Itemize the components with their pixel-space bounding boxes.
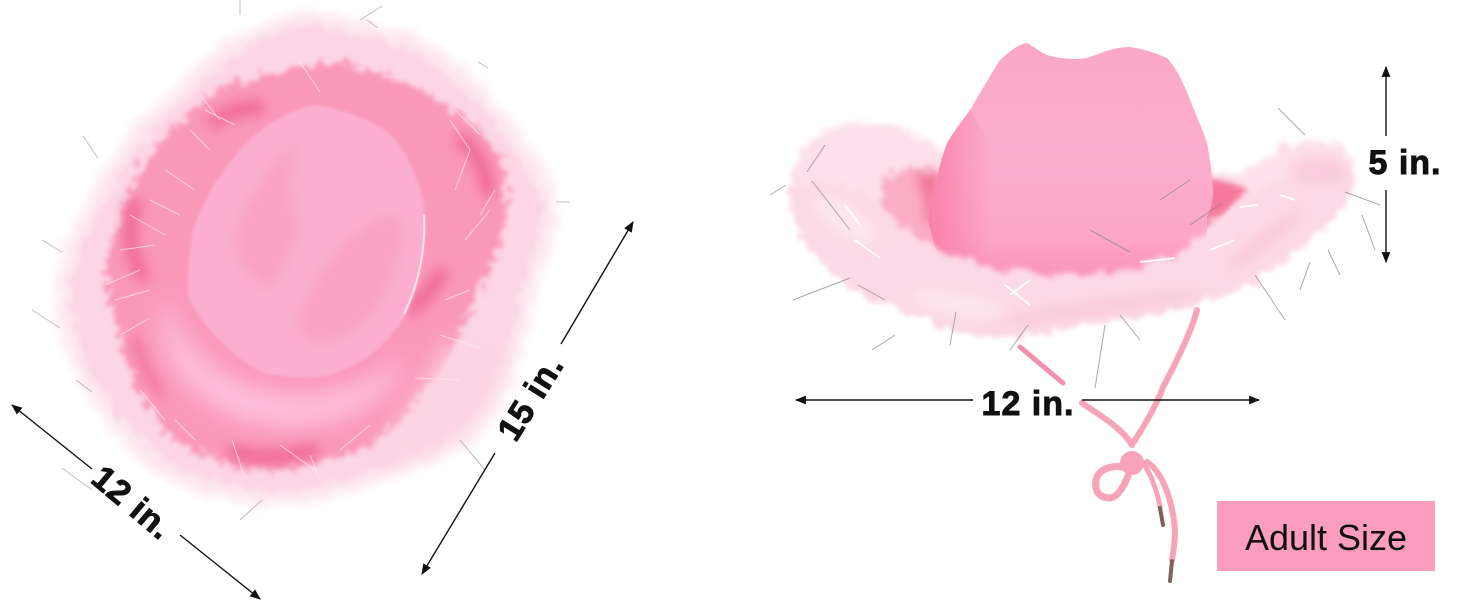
left hat tinsel [32,0,570,520]
right hat back feather trim [789,123,1354,337]
right hat cord right strand [1133,310,1197,443]
arrow: left hat 12 in. (lower segment) [180,535,260,599]
badge: adult size [1217,501,1435,571]
label: left hat length: 15 in. [490,349,572,447]
arrow: right hat height (lower) [1385,190,1387,262]
right hat cord short end [1143,463,1160,507]
left hat: top view [32,0,570,520]
left hat dark brim edge patches [130,108,488,457]
right hat white hairs [845,195,1295,305]
right hat tinsel [770,108,1380,388]
right hat feather shading [807,156,1350,330]
left hat feather trim [71,26,544,492]
right hat left inner pink [881,170,945,255]
arrow: right hat width (left) [796,399,973,401]
left hat lower right pale fur overlap [365,345,510,464]
left hat crown creases [236,145,400,342]
right hat cord loop [1096,467,1128,498]
right hat cord lower strand [1082,403,1132,445]
right hat front feather trim [789,167,1350,337]
badge: adult size: Adult Size [1245,517,1407,558]
right hat crown [928,43,1213,285]
right hat crown left shading [928,110,992,285]
right hat cord knot [1120,451,1144,475]
arrow: right hat height (upper) [1385,67,1387,136]
label: left hat width: 12 in. [84,459,180,547]
label: right hat height: 5 in. [1368,144,1442,182]
left hat outer feather halo [57,12,558,506]
right hat: side view [770,43,1380,581]
left hat light band below crown [163,295,405,426]
left hat white feather hairs [105,62,495,480]
right hat cord left strand [1020,347,1063,383]
right hat cord long end [1147,462,1175,560]
arrow: left hat 12 in. (upper segment) [12,405,92,469]
arrow: left hat 15 in. (lower segment) [422,453,495,574]
left hat band [404,215,424,314]
right hat right inner pink [1195,178,1248,235]
arrow: right hat width (right) [1082,399,1259,401]
left hat crown [188,105,426,377]
label: right hat width: 12 in. [982,385,1074,423]
left hat pink brim [105,62,506,469]
arrow: left hat 15 in. (upper segment) [561,222,633,344]
right hat chin cord [1020,310,1197,581]
